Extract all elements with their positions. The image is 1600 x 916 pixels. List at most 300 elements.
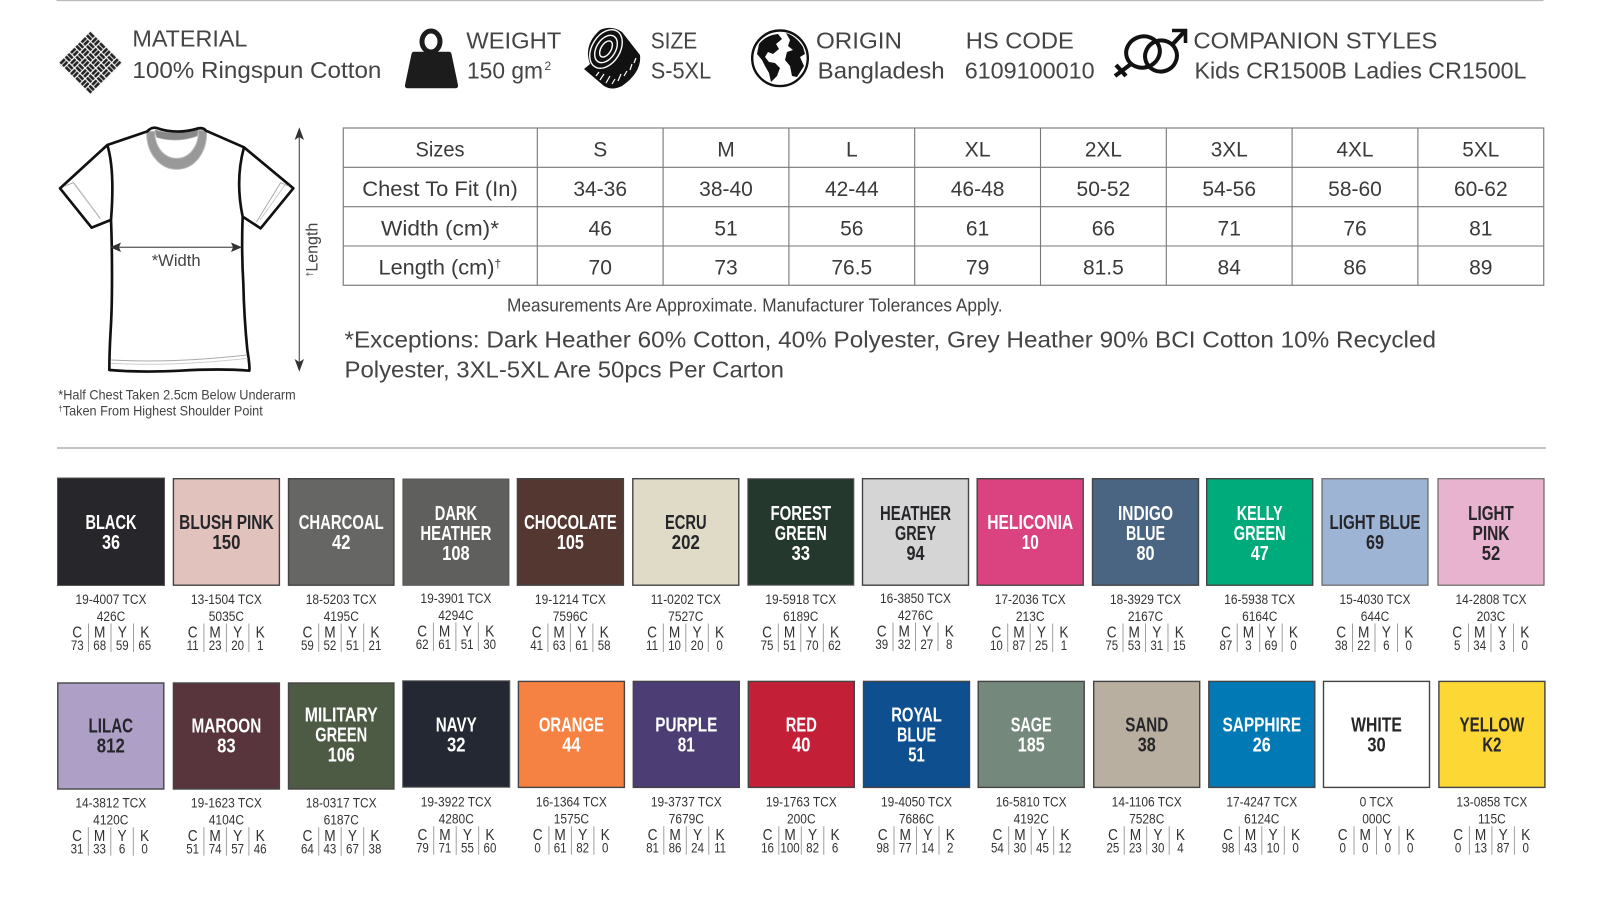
codes: K xyxy=(1060,827,1070,844)
colour chip xyxy=(1322,479,1428,585)
hs code: 6109100010 xyxy=(965,57,1095,83)
exceptions note: Polyester, 3XL-5XL Are 50pcs Per Carton xyxy=(344,356,784,382)
codes: Y xyxy=(1499,827,1508,844)
codes: C xyxy=(188,828,198,845)
codes: K xyxy=(831,827,840,844)
colour chip: GREY xyxy=(895,523,936,545)
codes: K xyxy=(370,625,380,642)
colour chip: BLUSH PINK xyxy=(179,512,274,534)
codes: M xyxy=(1130,827,1141,844)
colour chip: GREEN xyxy=(315,725,367,747)
colour chip xyxy=(633,681,739,787)
codes: M xyxy=(900,827,911,844)
row: width: 56 xyxy=(840,217,863,240)
icon: tape measure xyxy=(583,24,640,89)
codes: 213C xyxy=(1016,608,1045,624)
codes: 000C xyxy=(1362,811,1391,827)
codes: 14-1106 TCX xyxy=(1112,794,1182,810)
codes: 58 xyxy=(598,638,611,653)
codes: 63 xyxy=(553,638,566,653)
swatch: Sapphire 26 xyxy=(1209,681,1315,856)
codes: 13-0858 TCX xyxy=(1456,794,1528,810)
codes: 0 xyxy=(1290,638,1297,653)
codes: 98 xyxy=(1222,841,1234,856)
swatch: Blush Pink 150 xyxy=(173,479,279,653)
swatch: Red 40 xyxy=(748,681,854,856)
swatch: Royal Blue 51 xyxy=(864,681,970,856)
codes: M xyxy=(669,625,680,642)
codes: 23 xyxy=(1129,841,1142,856)
codes: C xyxy=(1338,827,1348,844)
codes: 51 xyxy=(783,638,796,653)
codes: M xyxy=(784,827,796,844)
codes: 75 xyxy=(1105,638,1118,653)
row: sizes: M xyxy=(717,139,735,162)
codes: 6 xyxy=(832,841,838,856)
codes: 68 xyxy=(93,638,106,653)
codes: 30 xyxy=(483,637,496,652)
swatch: White 30 xyxy=(1324,681,1430,856)
colour chip: 44 xyxy=(562,735,581,757)
codes: 11 xyxy=(646,638,658,653)
codes: 4195C xyxy=(324,608,359,624)
codes: 6 xyxy=(119,842,125,857)
codes: 14-2808 TCX xyxy=(1456,591,1527,607)
codes: 24 xyxy=(691,841,704,856)
codes: 38 xyxy=(1335,638,1348,653)
colour chip: BLUE xyxy=(897,725,936,747)
codes: 25 xyxy=(1107,841,1119,856)
swatch: Sand 38 xyxy=(1094,681,1200,856)
codes xyxy=(646,591,724,653)
codes: 200C xyxy=(787,811,816,827)
swatch: Purple 81 xyxy=(633,681,739,856)
colour chip: 32 xyxy=(447,735,465,757)
swatch: Sage 185 xyxy=(978,681,1084,856)
colour chip xyxy=(518,681,624,787)
measuring footnotes: *Half Chest Taken 2.5cm Below Underarm xyxy=(58,386,296,402)
codes xyxy=(1220,591,1298,653)
codes xyxy=(187,591,265,653)
colour chip: 83 xyxy=(217,736,236,758)
codes: C xyxy=(72,625,82,642)
codes: Y xyxy=(348,828,357,845)
codes: C xyxy=(1107,625,1117,642)
colour chip: 185 xyxy=(1018,735,1045,757)
codes: K xyxy=(256,828,265,845)
codes: 4104C xyxy=(209,812,244,828)
codes: Y xyxy=(808,625,817,642)
colour chip xyxy=(1324,681,1430,787)
measuring footnotes xyxy=(58,386,296,418)
companion styles: COMPANION STYLES xyxy=(1193,27,1437,53)
origin: ORIGIN xyxy=(816,27,902,53)
codes: Y xyxy=(118,828,127,845)
codes: 71 xyxy=(438,841,451,856)
codes: 51 xyxy=(346,638,359,653)
codes: Y xyxy=(1498,625,1507,642)
codes: 1575C xyxy=(554,811,589,827)
codes: K xyxy=(485,624,494,641)
codes: 51 xyxy=(461,637,474,652)
codes: 69 xyxy=(1265,638,1277,653)
codes: C xyxy=(647,625,657,642)
codes: 82 xyxy=(576,841,589,856)
codes: Y xyxy=(1383,827,1392,844)
codes: K xyxy=(140,828,149,845)
codes: C xyxy=(417,827,428,844)
codes xyxy=(1107,794,1185,856)
swatch: Light Blue 69 xyxy=(1322,479,1428,653)
codes: 0 xyxy=(1292,841,1299,856)
codes: C xyxy=(1452,625,1462,642)
colour chip: 30 xyxy=(1367,735,1386,757)
codes: 59 xyxy=(116,638,129,653)
colour chip: 47 xyxy=(1251,543,1269,565)
colour chip: BLUE xyxy=(1126,523,1165,545)
row: sizes xyxy=(416,139,1499,162)
swatch: Military Green 106 xyxy=(288,683,394,857)
colour chip xyxy=(1439,681,1545,787)
row: length: 79 xyxy=(966,256,989,279)
colour chip xyxy=(748,681,854,787)
hs code: HS CODE xyxy=(966,27,1074,53)
row: width: 61 xyxy=(966,217,989,240)
exceptions note xyxy=(344,326,1436,382)
codes: 14-3812 TCX xyxy=(75,795,147,811)
codes: Y xyxy=(693,625,702,642)
colour chip xyxy=(288,683,394,789)
codes: 62 xyxy=(828,638,841,653)
codes: 52 xyxy=(323,638,336,653)
codes: M xyxy=(94,625,105,642)
colour chip: 42 xyxy=(332,532,350,554)
codes: 11 xyxy=(714,841,726,856)
colour chip: GREEN xyxy=(1234,523,1286,545)
codes: C xyxy=(533,827,543,844)
codes: 12 xyxy=(1059,841,1071,856)
codes: Y xyxy=(118,625,127,642)
colour chip: MAROON xyxy=(192,715,261,737)
codes: M xyxy=(899,624,910,641)
codes: 6187C xyxy=(324,812,359,828)
codes: Y xyxy=(233,625,242,642)
colour chip xyxy=(1092,479,1198,585)
codes: 0 xyxy=(602,841,608,856)
codes: 82 xyxy=(806,841,819,856)
codes: 22 xyxy=(1357,638,1370,653)
swatch: Yellow K2 xyxy=(1439,681,1545,856)
codes: 11 xyxy=(187,638,199,653)
swatch: Black 36 xyxy=(58,478,164,653)
width arrow xyxy=(110,242,242,252)
codes: 0 xyxy=(534,841,541,856)
colour chip: CHARCOAL xyxy=(299,512,384,534)
row: width: 66 xyxy=(1092,217,1115,240)
codes: 16-3850 TCX xyxy=(880,590,951,606)
codes: 15 xyxy=(1173,638,1186,653)
codes: 0 xyxy=(1522,841,1529,856)
codes: 31 xyxy=(71,842,83,857)
codes: 19-5918 TCX xyxy=(765,591,837,607)
codes: C xyxy=(72,828,82,845)
swatch: Ecru 202 xyxy=(633,479,739,653)
row: length: 89 xyxy=(1469,256,1492,279)
codes: 6164C xyxy=(1242,608,1277,624)
codes: 0 xyxy=(1406,638,1412,653)
codes xyxy=(301,795,381,857)
colour chip: DARK xyxy=(435,503,477,525)
row: length: Length (cm) xyxy=(378,256,494,279)
row: length: 73 xyxy=(714,256,738,279)
codes: 4294C xyxy=(438,607,474,623)
colour chip: LIGHT xyxy=(1468,503,1514,525)
row: chest to fit: 54-56 xyxy=(1202,178,1256,201)
codes: 8 xyxy=(946,637,952,652)
colour chip: 106 xyxy=(328,745,355,767)
codes xyxy=(186,795,267,857)
codes: K xyxy=(716,827,725,844)
colour chip: MILITARY xyxy=(305,705,378,727)
codes: M xyxy=(209,625,221,642)
colour chip: INDIGO xyxy=(1118,503,1173,525)
colour chip: GREEN xyxy=(775,523,827,545)
swatch: Indigo Blue 80 xyxy=(1092,479,1198,653)
codes: 4280C xyxy=(439,811,474,827)
codes: C xyxy=(1453,827,1463,844)
weight: WEIGHT xyxy=(466,27,561,53)
codes: M xyxy=(1014,827,1026,844)
codes: 31 xyxy=(1150,638,1163,653)
codes: 34 xyxy=(1473,638,1486,653)
codes: 17-4247 TCX xyxy=(1226,794,1298,810)
codes: 4 xyxy=(1177,841,1184,856)
row: length: 86 xyxy=(1343,256,1367,279)
swatch: Navy 32 xyxy=(403,681,510,856)
codes: 0 xyxy=(1455,841,1461,856)
swatch: Kelly Green 47 xyxy=(1207,479,1313,653)
exceptions note: *Exceptions: Dark Heather 60% Cotton, 40% Polyester, Grey Heather 90% BCI Cotton 10% Recycled xyxy=(344,326,1436,352)
codes xyxy=(1222,794,1300,856)
colour chip xyxy=(633,479,739,585)
codes: 74 xyxy=(209,842,222,857)
colour chip xyxy=(1207,479,1313,585)
colour chip xyxy=(403,479,509,585)
codes: 51 xyxy=(186,842,199,857)
codes: 4192C xyxy=(1014,811,1049,827)
swatch: Light Pink 52 xyxy=(1438,479,1544,653)
codes: Y xyxy=(922,624,931,641)
codes: Y xyxy=(923,827,932,844)
codes: 18-5203 TCX xyxy=(306,591,377,607)
codes: 45 xyxy=(1036,841,1049,856)
colour chip xyxy=(517,479,623,585)
codes: 73 xyxy=(71,638,84,653)
codes: K xyxy=(370,828,380,845)
codes: Y xyxy=(808,827,817,844)
codes xyxy=(991,794,1071,856)
weight xyxy=(466,27,561,83)
codes: 75 xyxy=(761,638,773,653)
codes: M xyxy=(439,827,451,844)
codes: M xyxy=(324,625,336,642)
codes xyxy=(990,591,1069,653)
codes xyxy=(761,794,840,856)
codes: 14 xyxy=(921,841,934,856)
colour chip: 10 xyxy=(1022,532,1039,554)
material: MATERIAL xyxy=(132,26,247,52)
row: chest to fit: 58-60 xyxy=(1328,178,1382,201)
codes: Y xyxy=(577,625,586,642)
row: sizes: XL xyxy=(965,139,991,162)
codes: 0 xyxy=(1522,638,1528,653)
codes: 55 xyxy=(461,841,474,856)
codes: C xyxy=(302,828,313,845)
codes: K xyxy=(1404,625,1413,642)
swatch: Charcoal 42 xyxy=(288,479,394,653)
codes: K xyxy=(140,625,149,642)
colour chip: 26 xyxy=(1253,735,1271,757)
codes: 15-4030 TCX xyxy=(1340,591,1411,607)
row: length: 84 xyxy=(1218,256,1241,279)
colour chip: 38 xyxy=(1138,735,1156,757)
codes: 20 xyxy=(231,638,244,653)
codes: 62 xyxy=(416,637,429,652)
codes: 86 xyxy=(669,841,681,856)
codes xyxy=(761,591,841,653)
row: sizes: 5XL xyxy=(1462,139,1499,162)
codes: 16-1364 TCX xyxy=(536,794,607,810)
colour chip: 812 xyxy=(97,736,125,758)
weight: 150 gm xyxy=(467,57,543,83)
codes: 0 xyxy=(1362,841,1368,856)
codes: C xyxy=(992,827,1003,844)
codes: 53 xyxy=(1128,638,1141,653)
colour chip: HELICONIA xyxy=(987,512,1073,534)
codes: 46 xyxy=(254,842,267,857)
colour chip: 33 xyxy=(791,543,810,565)
companion styles: Kids CR1500B Ladies CR1500L xyxy=(1194,57,1526,83)
codes: 13 xyxy=(1474,841,1487,856)
codes: 43 xyxy=(1244,841,1257,856)
codes: 0 xyxy=(141,842,148,857)
codes: 87 xyxy=(1220,638,1232,653)
row: sizes: Sizes xyxy=(416,139,464,162)
codes: 65 xyxy=(138,638,151,653)
codes: C xyxy=(648,827,658,844)
codes: Y xyxy=(1269,827,1278,844)
origin xyxy=(816,27,945,83)
codes: 61 xyxy=(575,638,588,653)
codes: M xyxy=(94,828,105,845)
codes: 39 xyxy=(875,637,888,652)
codes: 38 xyxy=(369,842,381,857)
codes: K xyxy=(945,624,954,641)
codes: 98 xyxy=(876,841,889,856)
codes: 115C xyxy=(1478,811,1506,827)
codes: 644C xyxy=(1361,608,1389,624)
codes: 19-3737 TCX xyxy=(651,794,722,810)
codes xyxy=(71,795,149,857)
codes: C xyxy=(762,625,772,642)
codes: 7528C xyxy=(1129,811,1164,827)
colour chip: WHITE xyxy=(1351,714,1402,736)
colour chip xyxy=(862,479,968,585)
codes: 1 xyxy=(257,638,263,653)
codes: 64 xyxy=(301,842,314,857)
colour chip: 36 xyxy=(102,532,120,554)
codes: 17-2036 TCX xyxy=(995,591,1066,607)
colour chip: SAPPHIRE xyxy=(1222,714,1301,736)
codes: C xyxy=(188,625,198,642)
codes: 19-4050 TCX xyxy=(881,794,952,810)
colour chip: K2 xyxy=(1482,735,1501,757)
row: chest to fit: 60-62 xyxy=(1454,178,1508,201)
colour chip: PURPLE xyxy=(655,714,717,736)
swatch: Dark Heather 108 xyxy=(403,479,509,652)
colour chip xyxy=(977,479,1083,585)
colour chip: 94 xyxy=(906,543,925,565)
codes: K xyxy=(1520,625,1529,642)
codes: 2167C xyxy=(1128,608,1163,624)
codes: C xyxy=(1223,827,1233,844)
codes: 10 xyxy=(990,638,1003,653)
codes: K xyxy=(1059,625,1069,642)
row: sizes: L xyxy=(846,139,858,162)
tolerance note: Measurements Are Approximate. Manufacturer Tolerances Apply. xyxy=(507,296,1003,316)
colour chip xyxy=(403,681,510,787)
row: length: 70 xyxy=(589,256,612,279)
codes: 7527C xyxy=(668,608,703,624)
codes: M xyxy=(209,828,221,845)
swatch: Heliconia 10 xyxy=(977,479,1083,653)
row: chest to fit: 34-36 xyxy=(573,178,627,201)
codes: 33 xyxy=(93,842,106,857)
row: length xyxy=(378,256,1492,279)
codes: Y xyxy=(1153,827,1163,844)
swatch: Lilac 812 xyxy=(58,683,164,857)
codes: 3 xyxy=(1245,638,1252,653)
colour chip: BLACK xyxy=(86,512,137,534)
codes xyxy=(1452,591,1529,653)
codes: Y xyxy=(1266,625,1276,642)
hs code xyxy=(965,27,1095,83)
colour chip xyxy=(1209,681,1315,787)
colour chip: NAVY xyxy=(436,714,477,736)
colour chip xyxy=(58,683,164,789)
codes: 19-3922 TCX xyxy=(421,794,492,810)
swatch: Heather Grey 94 xyxy=(862,479,968,652)
size table xyxy=(343,128,1544,285)
codes: M xyxy=(324,828,336,845)
row: chest to fit: 50-52 xyxy=(1077,178,1130,201)
codes: 70 xyxy=(806,638,819,653)
row: width: 76 xyxy=(1343,217,1367,240)
codes: 43 xyxy=(323,842,336,857)
material xyxy=(132,26,381,83)
codes: 57 xyxy=(231,842,244,857)
swatch: Forest Green 33 xyxy=(748,479,854,653)
colour chip: 81 xyxy=(678,735,695,757)
colour chip: YELLOW xyxy=(1460,714,1524,736)
codes: C xyxy=(302,625,313,642)
codes: Y xyxy=(1038,827,1047,844)
codes: 87 xyxy=(1012,638,1025,653)
codes: 7686C xyxy=(899,811,934,827)
colour chip: 150 xyxy=(212,532,240,554)
codes: Y xyxy=(1382,625,1391,642)
codes: C xyxy=(763,827,773,844)
